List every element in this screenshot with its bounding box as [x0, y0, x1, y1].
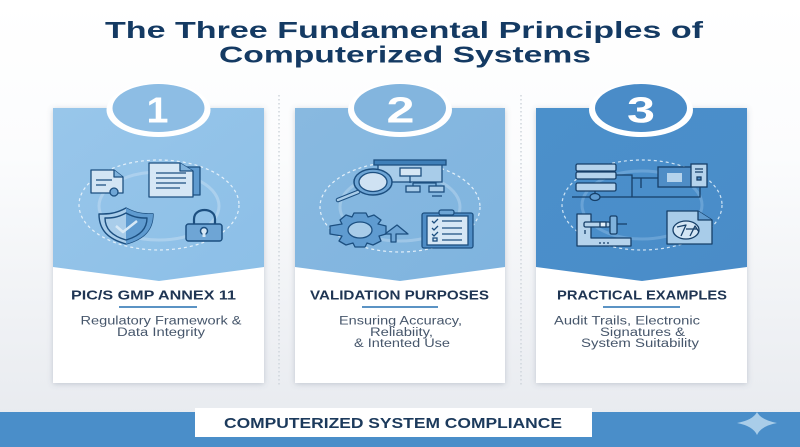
panel: Validation Purposes — [295, 83, 505, 383]
icon: checklist clipboard — [422, 210, 473, 248]
number badge 1 — [106, 83, 210, 137]
number badge 1: 1 — [146, 90, 168, 130]
number badge 3 — [589, 83, 693, 137]
icon: network with servers — [572, 164, 707, 200]
icon: sparkle star — [737, 412, 777, 435]
description: Regulatory Framework & — [80, 316, 242, 328]
description — [80, 316, 242, 339]
description: & Intented Use — [354, 338, 450, 350]
number badge 3: 3 — [627, 90, 655, 130]
description: Audit Trails, Electronic — [554, 316, 700, 328]
icon: gear with arrow — [330, 213, 408, 247]
panel: PIC/S GMP Annex 11 — [53, 83, 264, 383]
footer label: COMPUTERIZED SYSTEM COMPLIANCE — [224, 415, 562, 432]
number badge 2: 2 — [386, 90, 414, 130]
description: Ensuring Accuracy, — [339, 316, 462, 328]
heading: VALIDATION PURPOSES — [310, 288, 489, 302]
panel: Practical Examples — [536, 83, 747, 383]
footer label — [195, 408, 592, 437]
icon: lab instrument — [577, 214, 631, 246]
description — [554, 316, 700, 350]
title: The Three Fundamental Principles of — [105, 17, 703, 43]
heading: PIC/S GMP ANNEX 11 — [71, 288, 236, 302]
icon: flowchart board — [374, 160, 446, 196]
number badge 2 — [348, 83, 452, 137]
footer band — [0, 408, 800, 447]
icon: document stack — [149, 163, 200, 197]
description — [339, 316, 462, 350]
icon: padlock — [186, 210, 222, 241]
icon: shield with check — [99, 208, 153, 244]
description: Reliabiity, — [370, 327, 433, 339]
description: Data Integrity — [117, 327, 205, 339]
title — [105, 17, 703, 68]
icon: signed document — [667, 211, 712, 244]
description: Signatures & — [600, 327, 685, 339]
title: Computerized Systems — [219, 42, 591, 68]
heading: PRACTICAL EXAMPLES — [557, 288, 727, 302]
description: System Suitability — [581, 338, 699, 350]
icon: certificate document — [91, 170, 123, 196]
icon: magnifying glass — [338, 169, 392, 200]
